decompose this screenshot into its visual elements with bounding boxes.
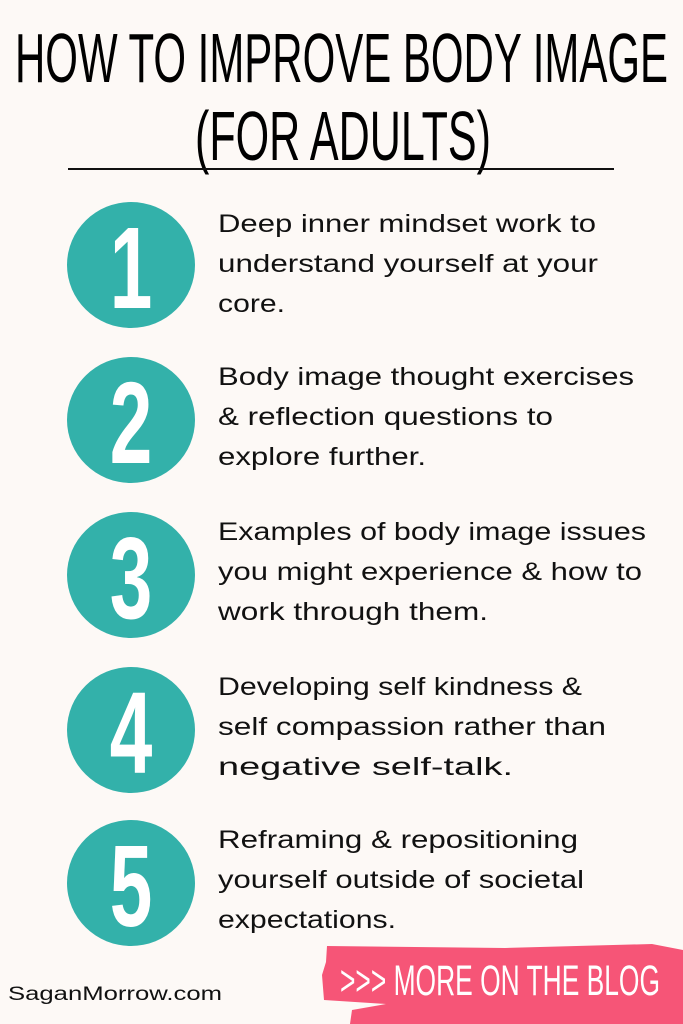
text 2: & reflection questions to bbox=[218, 403, 553, 431]
text 5: yourself outside of societal bbox=[218, 866, 584, 894]
icon: number 5: 5 bbox=[110, 821, 152, 951]
text 4: self compassion rather than bbox=[218, 713, 606, 741]
icon: number 3: 3 bbox=[110, 513, 152, 643]
item 3 bbox=[67, 512, 646, 643]
item 2 bbox=[67, 357, 634, 488]
item 5 bbox=[67, 820, 584, 951]
text 1: Deep inner mindset work to bbox=[218, 210, 596, 238]
text 3: Examples of body image issues bbox=[218, 518, 646, 546]
icon: number 2: 2 bbox=[110, 358, 152, 488]
text 2: Body image thought exercises bbox=[218, 363, 634, 391]
text 3: you might experience & how to bbox=[218, 558, 642, 586]
footer: website: SaganMorrow.com bbox=[8, 984, 222, 1005]
text 4: Developing self kindness & bbox=[218, 673, 582, 701]
text 5: expectations. bbox=[218, 906, 396, 934]
icon: number 1 bbox=[67, 202, 195, 333]
icon: number 3 bbox=[67, 512, 195, 643]
text 5: Reframing & repositioning bbox=[218, 826, 578, 854]
icon: number 4 bbox=[67, 667, 195, 798]
item 4 bbox=[67, 667, 606, 798]
text 1: core. bbox=[218, 290, 285, 318]
icon: number 4: 4 bbox=[110, 668, 153, 798]
text 3 bbox=[217, 518, 646, 626]
text 1: understand yourself at your bbox=[218, 250, 598, 278]
text 4: negative self-talk. bbox=[218, 753, 513, 781]
text 1 bbox=[218, 210, 598, 318]
icon: number 1: 1 bbox=[110, 203, 152, 333]
item 1 bbox=[67, 202, 598, 333]
button: more on the blog bbox=[322, 944, 683, 1024]
text 5 bbox=[218, 826, 584, 934]
text 2: explore further. bbox=[218, 443, 426, 471]
title bbox=[15, 19, 668, 175]
icon: number 2 bbox=[67, 357, 195, 488]
icon: number 5 bbox=[67, 820, 195, 951]
title: (FOR ADULTS) bbox=[195, 97, 491, 175]
text 3: work through them. bbox=[217, 598, 488, 626]
text 4 bbox=[218, 673, 606, 781]
text 2 bbox=[218, 363, 634, 471]
